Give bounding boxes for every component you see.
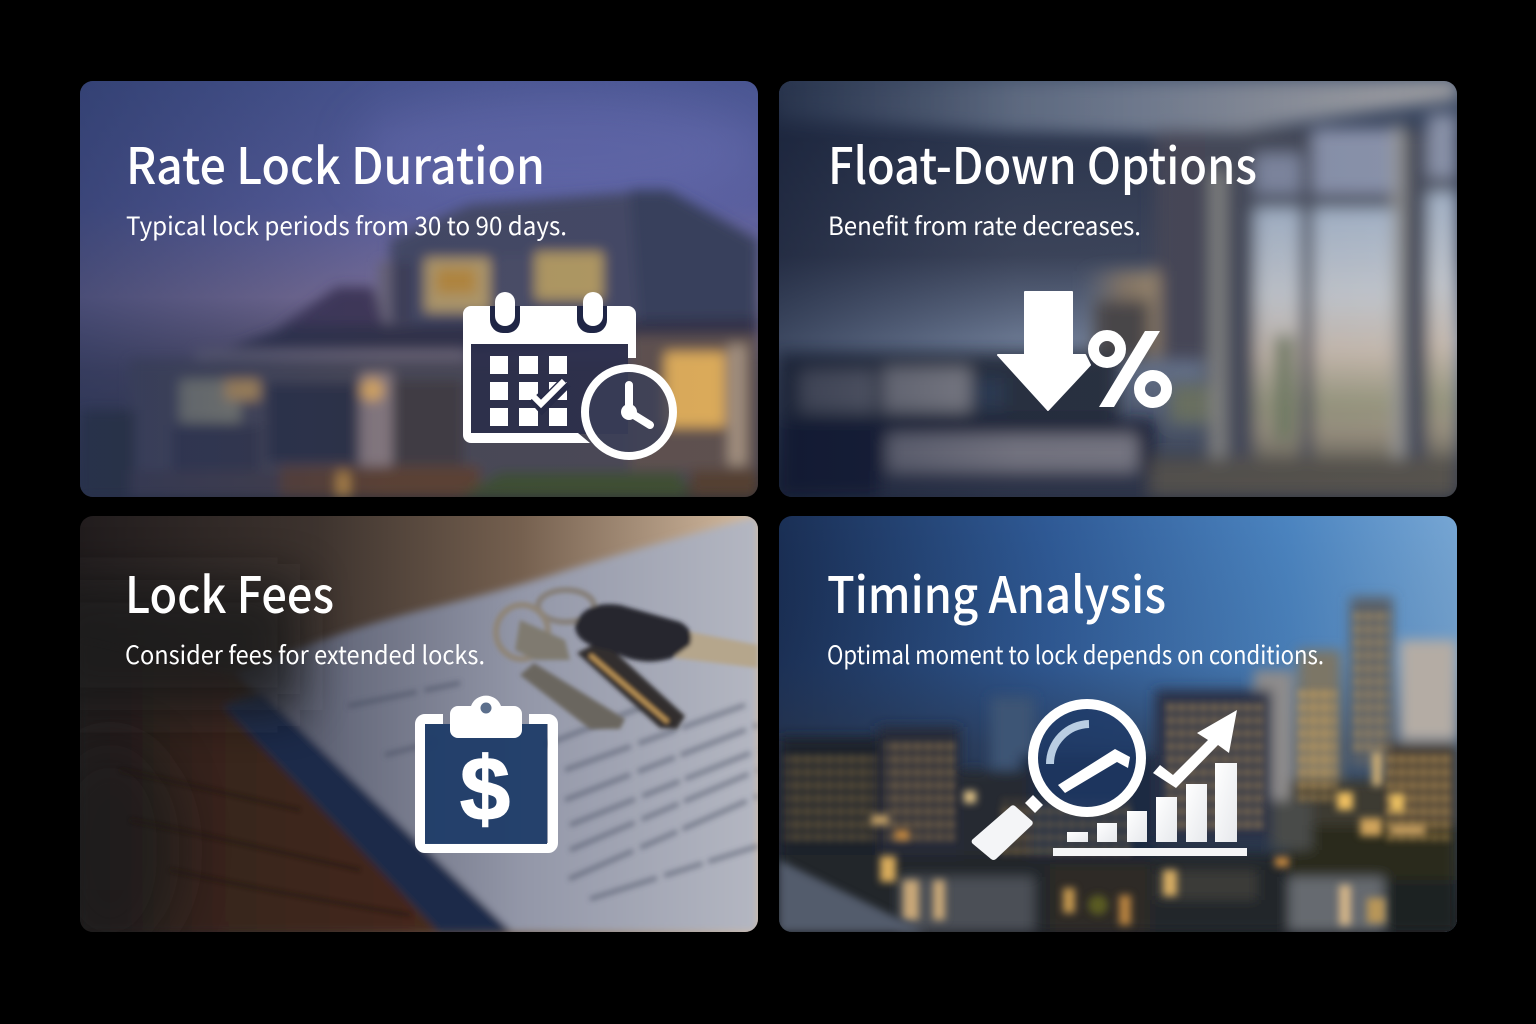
description: Consider fees for extended locks. (125, 636, 485, 672)
icon: clipboard with dollar (420, 696, 553, 848)
icon: down arrow with percent (998, 292, 1166, 410)
panel: Float-Down Options (779, 81, 1457, 497)
description: Benefit from rate decreases. (828, 207, 1141, 243)
heading: Float-Down Options (828, 127, 1257, 199)
description: Optimal moment to lock depends on conditions. (827, 636, 1324, 672)
icon: clipboard with dollar: $ (460, 740, 510, 840)
panel: Timing Analysis (779, 516, 1457, 932)
heading: Rate Lock Duration (126, 127, 545, 199)
icon: calendar with clock (463, 292, 673, 456)
panel: Rate Lock Duration (80, 81, 760, 497)
heading: Lock Fees (125, 556, 334, 628)
panel: Lock Fees (80, 516, 758, 932)
icon: magnifier with growth chart (972, 704, 1247, 860)
description: Typical lock periods from 30 to 90 days. (126, 207, 567, 243)
heading: Timing Analysis (827, 556, 1166, 628)
